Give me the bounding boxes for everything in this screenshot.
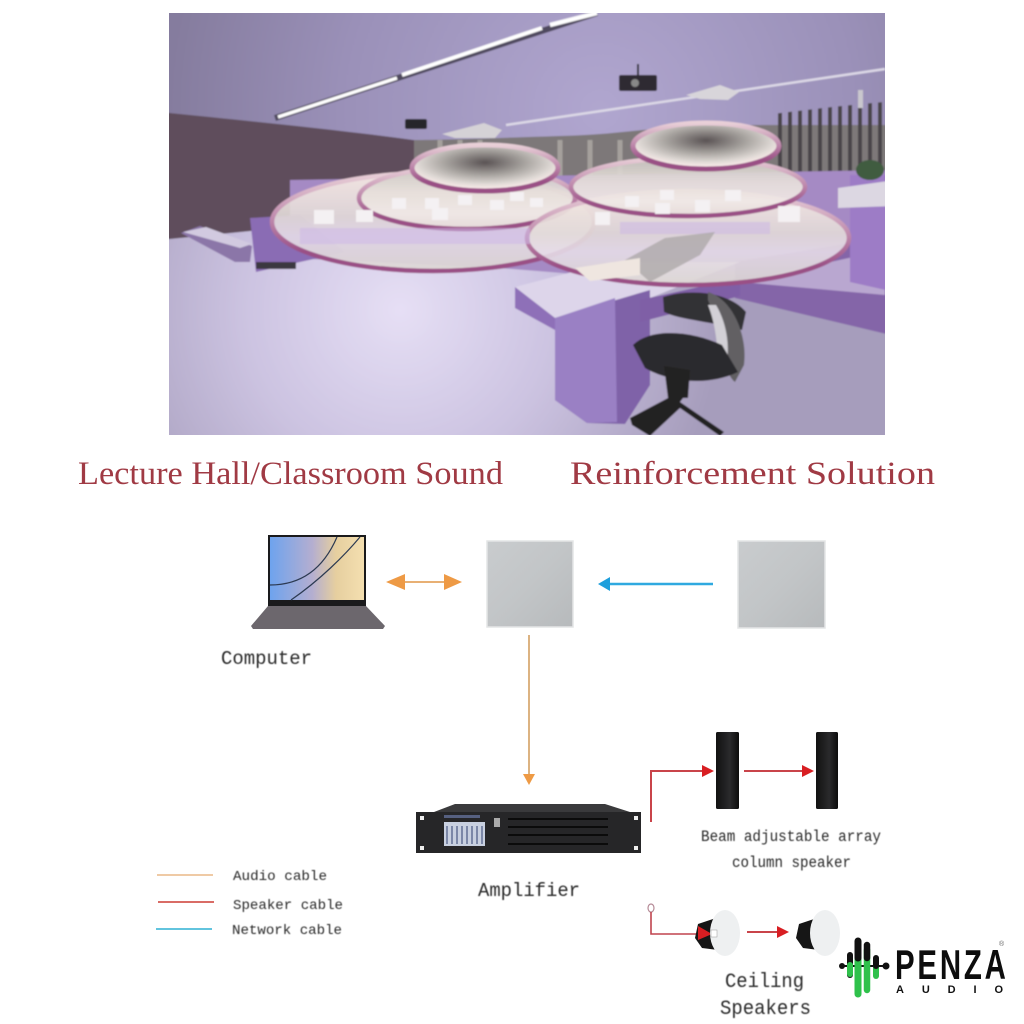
ceiling speaker panel right	[686, 85, 739, 100]
logo wordmark: PENZA	[895, 941, 1009, 988]
coverage ellipse 6	[527, 191, 849, 285]
projector left	[405, 119, 427, 129]
legend: audio cable line	[157, 874, 213, 876]
hanging lamp	[858, 90, 863, 108]
label: column speaker	[701, 828, 881, 872]
arrow: between column speakers	[744, 765, 814, 777]
device: network panel centre	[487, 541, 573, 627]
papers on desk through ellipse	[575, 258, 640, 281]
device: amplifier	[416, 804, 641, 853]
arrow: laptop to panel, double headed	[386, 574, 462, 590]
label line 1: Beam adjustable array	[701, 828, 881, 846]
legend: speaker cable text: Speaker cable	[233, 898, 343, 914]
device: network panel right	[738, 541, 825, 628]
right riser ledge	[754, 257, 885, 296]
seats seen through the ellipses	[314, 190, 800, 225]
speaker cable to ceiling speakers	[648, 904, 700, 934]
label: ceiling speakers	[720, 971, 811, 1021]
legend: speaker cable line	[158, 901, 214, 903]
logo subtitle: AUDIO	[896, 984, 1003, 996]
logo waveform icon	[839, 941, 890, 994]
ceiling front curve	[178, 102, 881, 141]
plant	[856, 160, 884, 180]
arrow: audio cable down to amplifier	[523, 635, 535, 785]
front desk	[515, 262, 740, 424]
left low step platform	[181, 226, 252, 262]
label: amplifier: Amplifier	[478, 880, 580, 902]
seating block in background	[289, 169, 885, 274]
office chair	[630, 292, 746, 436]
long ceiling light strip	[275, 13, 597, 118]
logo: Penza Audio	[839, 940, 1009, 996]
label line 2: column speaker	[732, 854, 851, 872]
column speaker 2	[816, 732, 838, 809]
desk panel visible through ellipse	[625, 232, 715, 282]
title left part: Lecture Hall/Classroom Sound	[78, 456, 504, 492]
logo registered mark: ®	[999, 940, 1005, 948]
ceiling speaker panel left	[442, 123, 502, 138]
coverage ellipse 3	[412, 145, 558, 191]
arrow: speaker cable to column speakers	[651, 765, 714, 822]
back wall slats	[413, 102, 885, 176]
label line 1: Ceiling	[725, 971, 804, 994]
left wall	[160, 112, 414, 240]
projector right	[619, 64, 657, 91]
icon: laptop computer	[251, 535, 385, 629]
ceiling rail conduit	[506, 69, 885, 125]
right riser	[734, 245, 885, 334]
right upper riser	[850, 175, 885, 290]
legend	[156, 869, 343, 939]
coverage ellipse 1	[272, 173, 594, 271]
coverage ellipse 2	[359, 167, 575, 229]
arrow: network, blue	[598, 577, 713, 591]
purple seating band through the ellipses	[300, 222, 770, 244]
legend: audio cable text: Audio cable	[233, 869, 327, 885]
label: computer: Computer	[221, 648, 312, 670]
legend: network cable text: Network cable	[232, 923, 342, 939]
photo: lecture hall with sound coverage ellipses	[160, 5, 895, 445]
icon: ceiling speaker 1	[695, 910, 740, 956]
left riser	[249, 216, 316, 272]
legend: network cable line	[156, 928, 212, 930]
coverage ellipse 4	[633, 123, 779, 169]
column speaker 1	[716, 732, 739, 809]
icon: ceiling speaker 2	[796, 910, 840, 956]
coverage ellipse 5	[571, 158, 805, 216]
ceiling	[383, 101, 885, 288]
riser casters	[256, 262, 296, 269]
arrow: between ceiling speakers	[747, 926, 789, 938]
label line 2: Speakers	[720, 998, 811, 1021]
step top	[183, 227, 252, 248]
floor	[160, 225, 895, 445]
right tier seats	[837, 180, 885, 209]
title right part: Reinforcement Solution	[570, 456, 935, 492]
